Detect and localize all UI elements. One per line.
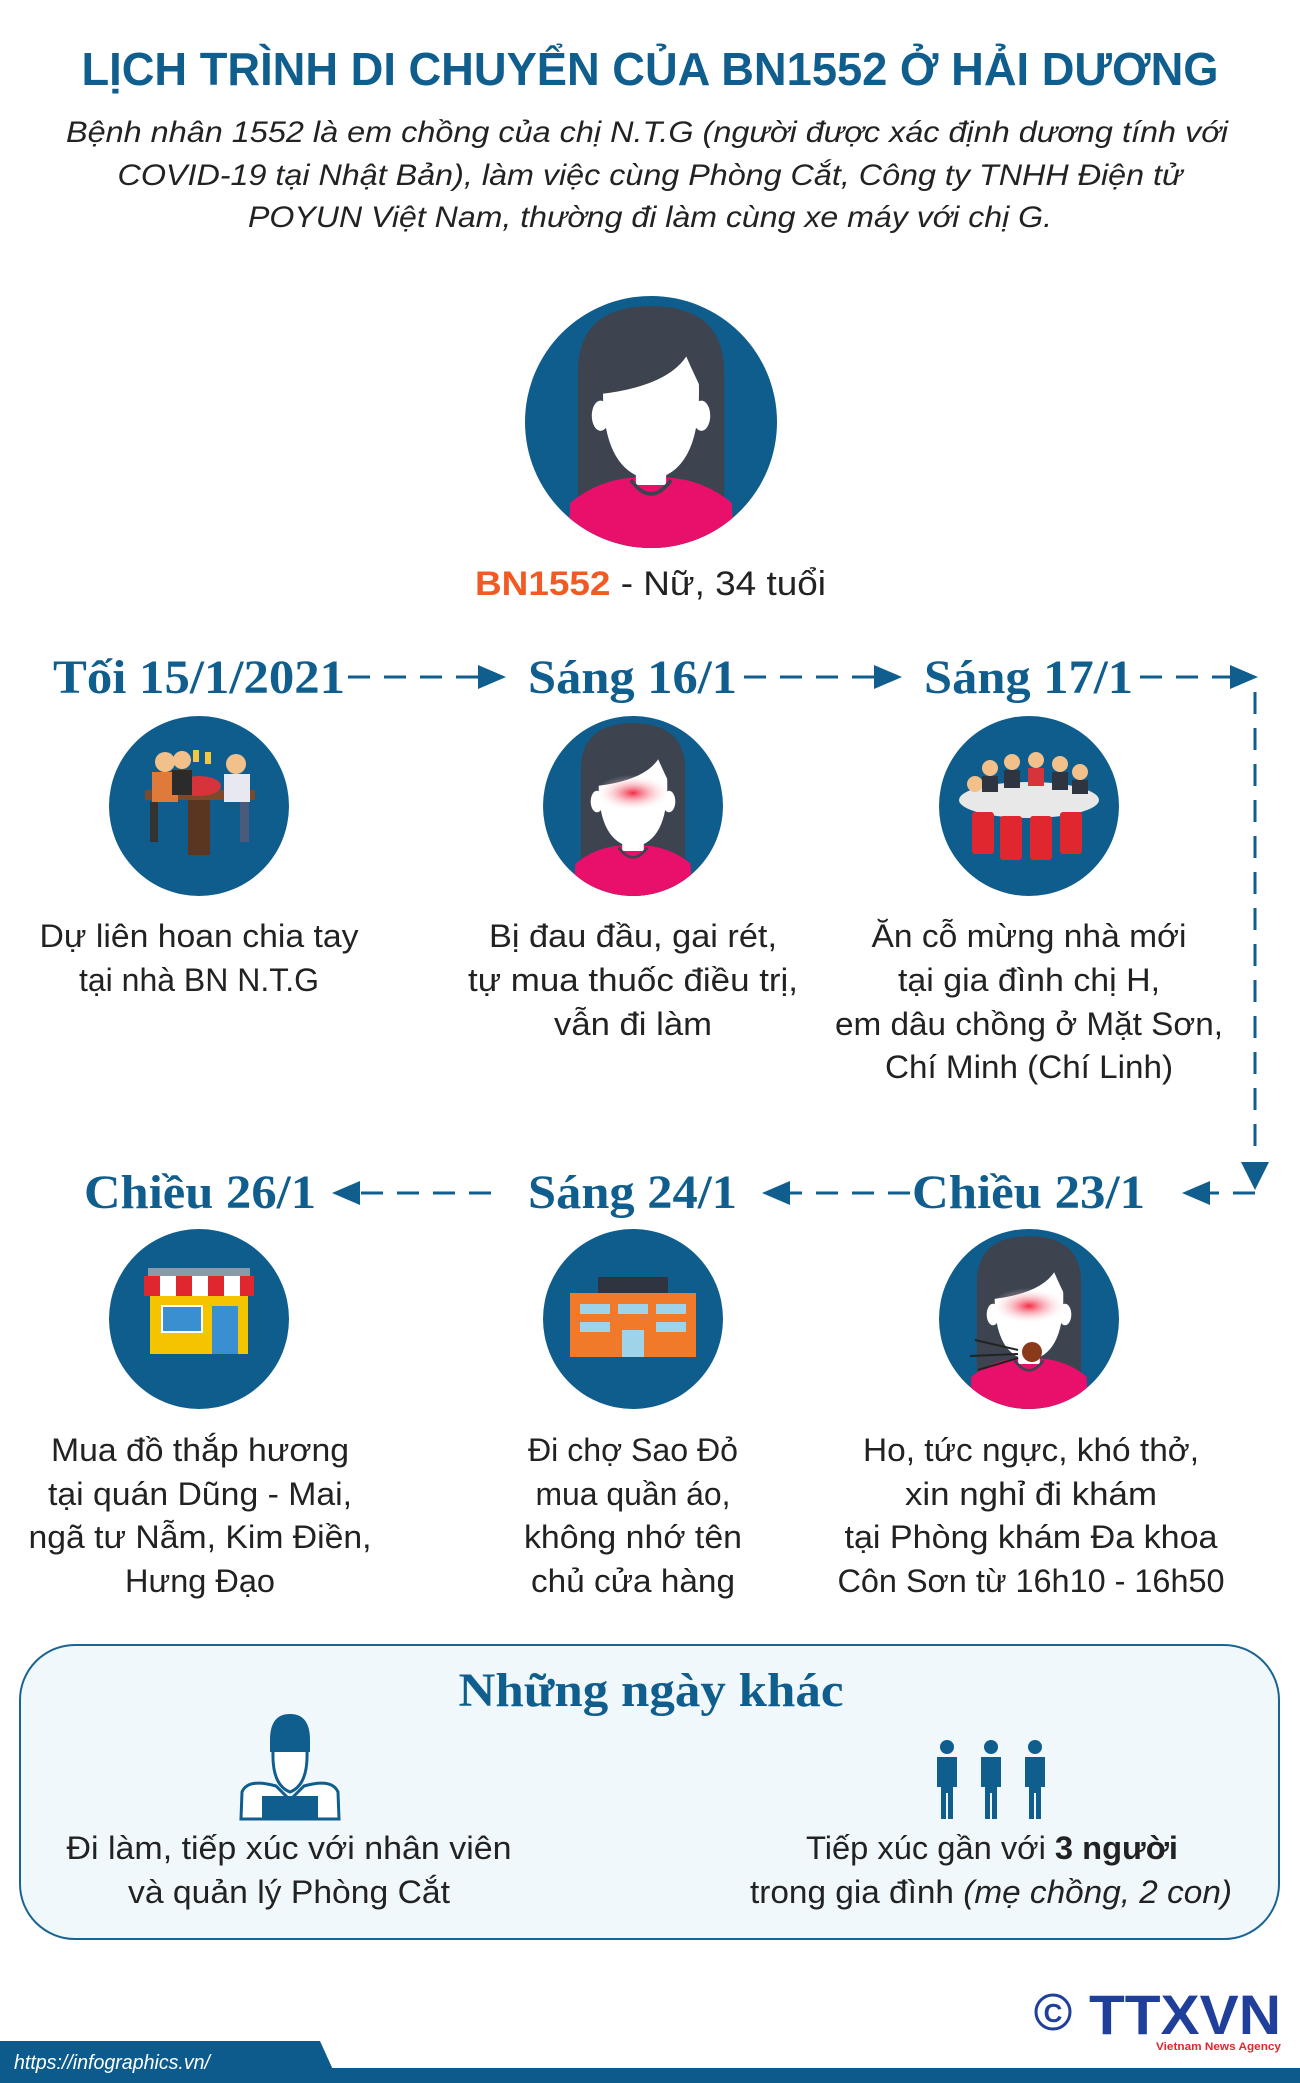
text: 17/1 — [835, 918, 1223, 1085]
text: 26/1 — [28, 1432, 372, 1599]
footer bar: https://infographics.vn/ — [14, 2052, 212, 2074]
icon: three people — [937, 1740, 1045, 1819]
text: 24/1: Đi chợ Sao Đỏ — [528, 1432, 738, 1468]
text: 17/1: Ăn cỗ mừng nhà mới — [872, 918, 1186, 954]
text: family contacts: trong gia đình (mẹ chồng, 2 con) — [750, 1874, 1232, 1910]
text: 24/1: không nhớ tên — [524, 1519, 742, 1555]
text: 26/1: Hưng Đạo — [125, 1563, 275, 1599]
timeline arrows — [348, 677, 1255, 1193]
subtitle: Bệnh nhân 1552 là em chồng của chị N.T.G (người được xác định dương tính với — [66, 116, 1229, 149]
text: 23/1 — [838, 1432, 1224, 1599]
date headings: Chiều 23/1 — [912, 1166, 1145, 1219]
text: 16/1: vẫn đi làm — [554, 1006, 712, 1042]
icon: shop — [109, 1229, 289, 1409]
icon: worker — [241, 1714, 339, 1819]
logo: TTXVN — [1036, 1983, 1282, 2053]
icon: building market — [543, 1229, 723, 1409]
date headings: Chiều 26/1 — [84, 1166, 316, 1219]
text: 24/1: mua quần áo, — [536, 1476, 730, 1512]
text: 17/1: tại gia đình chị H, — [898, 962, 1160, 998]
text: 26/1: Mua đồ thắp hương — [51, 1432, 349, 1468]
text: work contacts: và quản lý Phòng Cắt — [128, 1874, 450, 1910]
logo: TTXVN: C — [1044, 1998, 1063, 2028]
text: family contacts: Tiếp xúc gần với 3 người — [806, 1830, 1178, 1866]
text: family contacts — [750, 1830, 1232, 1910]
text: 17/1: em dâu chồng ở Mặt Sơn, — [835, 1006, 1223, 1042]
text: work contacts: Đi làm, tiếp xúc với nhân viên — [66, 1830, 512, 1866]
date headings — [53, 651, 1145, 1219]
text: 23/1: xin nghỉ đi khám — [905, 1476, 1157, 1512]
date headings: Sáng 24/1 — [528, 1166, 737, 1219]
subtitle — [66, 116, 1229, 234]
icon: headache woman — [543, 716, 723, 896]
text: 24/1: chủ cửa hàng — [531, 1563, 735, 1599]
title: LỊCH TRÌNH DI CHUYỂN CỦA BN1552 Ở HẢI DƯƠNG — [82, 43, 1218, 95]
text: 17/1: Chí Minh (Chí Linh) — [885, 1049, 1173, 1085]
text: 26/1: ngã tư Nẫm, Kim Điền, — [28, 1519, 372, 1555]
icon: farewell party — [109, 716, 289, 896]
date headings: Sáng 16/1 — [528, 651, 737, 704]
logo: TTXVN: Vietnam News Agency — [1156, 2041, 1282, 2053]
text: 15/1: Dự liên hoan chia tay — [40, 918, 358, 954]
logo: TTXVN: TTXVN — [1089, 1983, 1281, 2046]
text: work contacts — [66, 1830, 512, 1910]
text: 23/1: Côn Sơn từ 16h10 - 16h50 — [838, 1563, 1224, 1599]
text: 15/1 — [40, 918, 358, 998]
text: 26/1: tại quán Dũng - Mai, — [48, 1476, 352, 1512]
text: 16/1: Bị đau đầu, gai rét, — [489, 918, 777, 954]
date headings: Tối 15/1/2021 — [53, 651, 345, 704]
panel: other days — [20, 1645, 1279, 1939]
icon: patient avatar — [525, 296, 777, 548]
subtitle: POYUN Việt Nam, thường đi làm cùng xe máy với chị G. — [248, 201, 1052, 234]
text: 16/1: tự mua thuốc điều trị, — [468, 962, 798, 998]
patient label: BN1552 - Nữ, 34 tuổi — [475, 565, 826, 603]
date headings: Sáng 17/1 — [924, 651, 1133, 704]
text: 16/1 — [468, 918, 798, 1042]
text: 15/1: tại nhà BN N.T.G — [79, 962, 319, 998]
icon: housewarming feast — [939, 716, 1119, 896]
text: 23/1: Ho, tức ngực, khó thở, — [863, 1432, 1199, 1468]
panel heading: Những ngày khác — [458, 1664, 844, 1717]
footer bar — [0, 2041, 1300, 2083]
subtitle: COVID-19 tại Nhật Bản), làm việc cùng Phòng Cắt, Công ty TNHH Điện tử — [118, 159, 1185, 192]
text: 24/1 — [524, 1432, 742, 1599]
icon: coughing woman — [939, 1229, 1119, 1409]
text: 23/1: tại Phòng khám Đa khoa — [844, 1519, 1218, 1555]
